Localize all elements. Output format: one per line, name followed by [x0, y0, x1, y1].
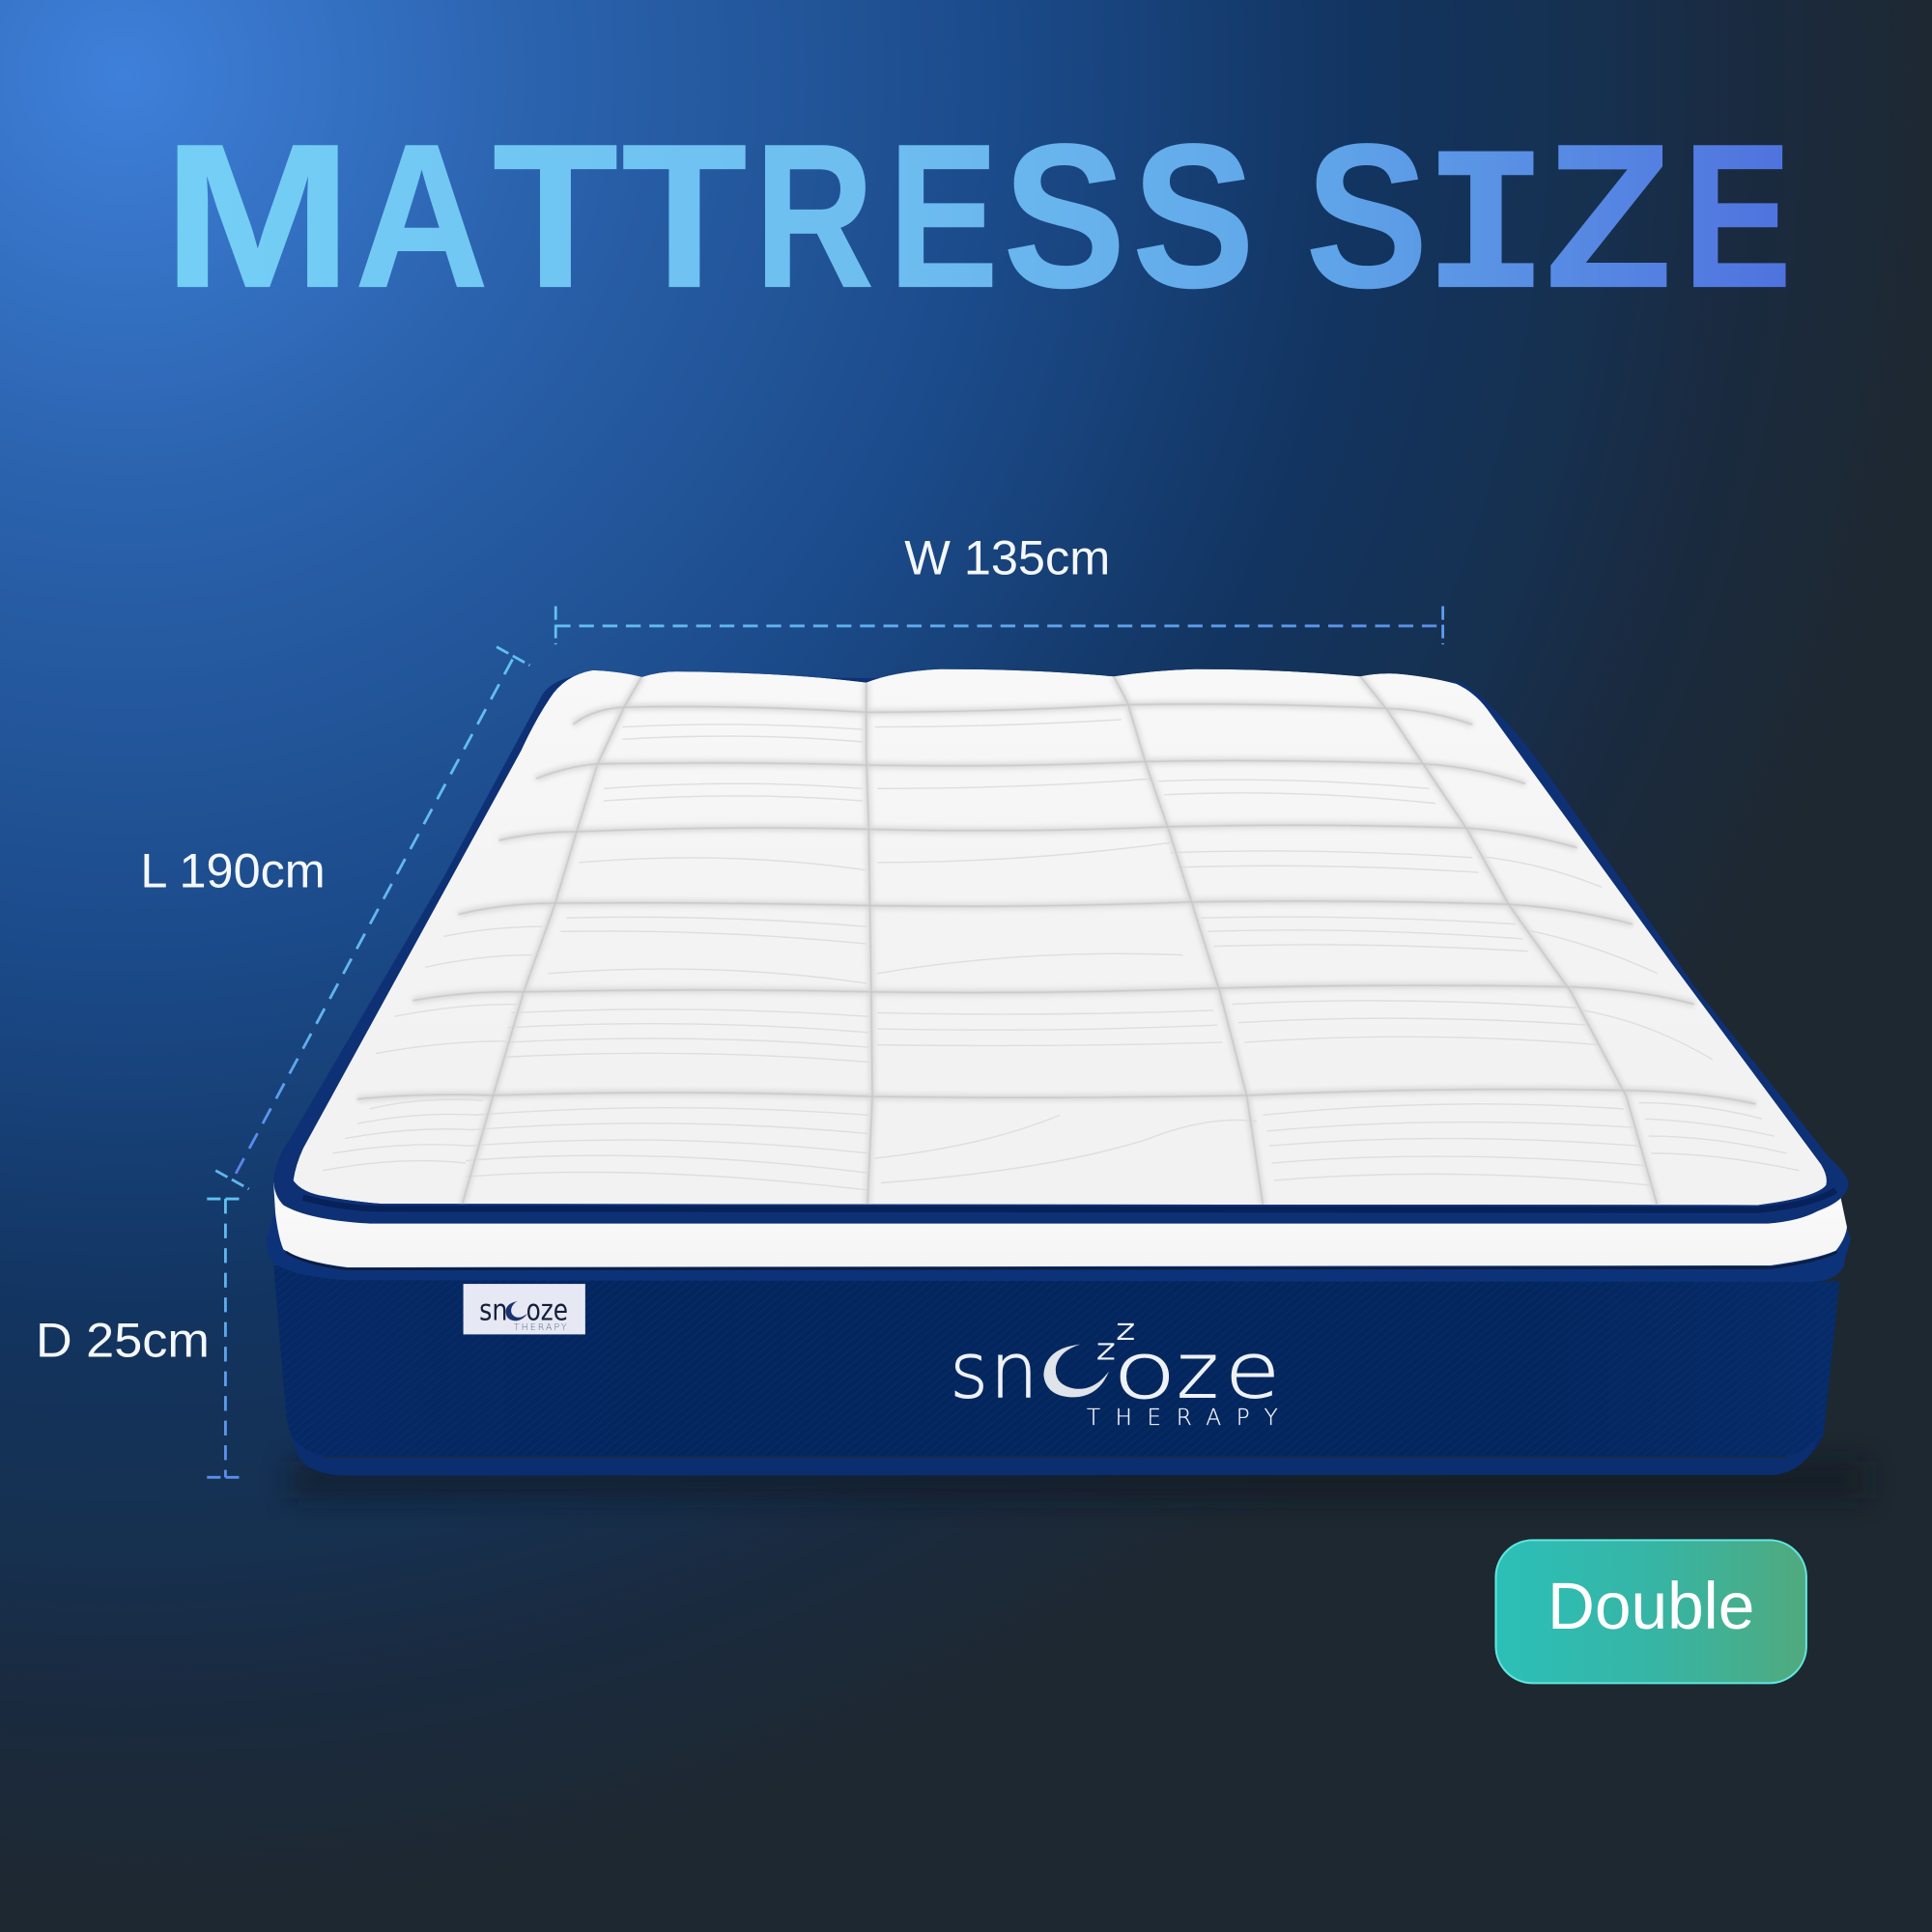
- brand logo: [950, 1313, 1280, 1431]
- title: T: [493, 101, 618, 330]
- title: R: [754, 101, 874, 330]
- floor shadow: [290, 1462, 1866, 1498]
- title: M: [163, 101, 353, 330]
- mattress: [267, 669, 1866, 1498]
- wave stitching texture: [323, 720, 1799, 1190]
- title: [163, 101, 1792, 349]
- size badge: Double: [1548, 1569, 1754, 1643]
- depth label: D 25cm: [36, 1313, 210, 1367]
- pillow-top white band: [273, 1182, 1847, 1269]
- brand logo: n: [990, 1326, 1038, 1415]
- soft seam shadows: [357, 676, 1756, 1205]
- icon: tag crescent: [506, 1301, 527, 1321]
- brand logo: s: [950, 1326, 988, 1415]
- top surface piping: [273, 676, 1849, 1224]
- icon: crescent moon: [1043, 1345, 1109, 1397]
- title: A: [355, 101, 489, 330]
- sewn-on label tag: [464, 1284, 585, 1334]
- title: I: [1423, 117, 1548, 349]
- width dimension line: [555, 607, 1443, 644]
- quilted top surface: [294, 669, 1827, 1205]
- brand logo: THERAPY: [1087, 1406, 1278, 1431]
- length label: L 190cm: [140, 843, 326, 897]
- title: E: [889, 101, 998, 330]
- title: T: [621, 101, 747, 330]
- length dimension line: [215, 647, 529, 1189]
- title: S: [1004, 101, 1125, 330]
- sewn-on label tag: oze: [526, 1294, 568, 1328]
- brand logo: e: [1225, 1326, 1280, 1415]
- side panel: [267, 1203, 1851, 1475]
- width label: W 135cm: [904, 530, 1110, 584]
- size badge: [1495, 1540, 1806, 1683]
- brand logo: z: [1177, 1326, 1218, 1415]
- sewn-on label tag: THERAPY: [514, 1322, 567, 1333]
- sewn-on label tag: sn: [479, 1294, 508, 1328]
- brand logo: o: [1113, 1326, 1177, 1415]
- title: Z: [1545, 101, 1672, 330]
- brand logo: z: [1117, 1313, 1135, 1346]
- title: E: [1683, 101, 1792, 330]
- title: S: [1306, 101, 1428, 330]
- title: S: [1132, 101, 1255, 330]
- depth dimension line: [207, 1199, 244, 1477]
- crisp seams: [357, 676, 1756, 1205]
- brand logo: z: [1096, 1333, 1115, 1366]
